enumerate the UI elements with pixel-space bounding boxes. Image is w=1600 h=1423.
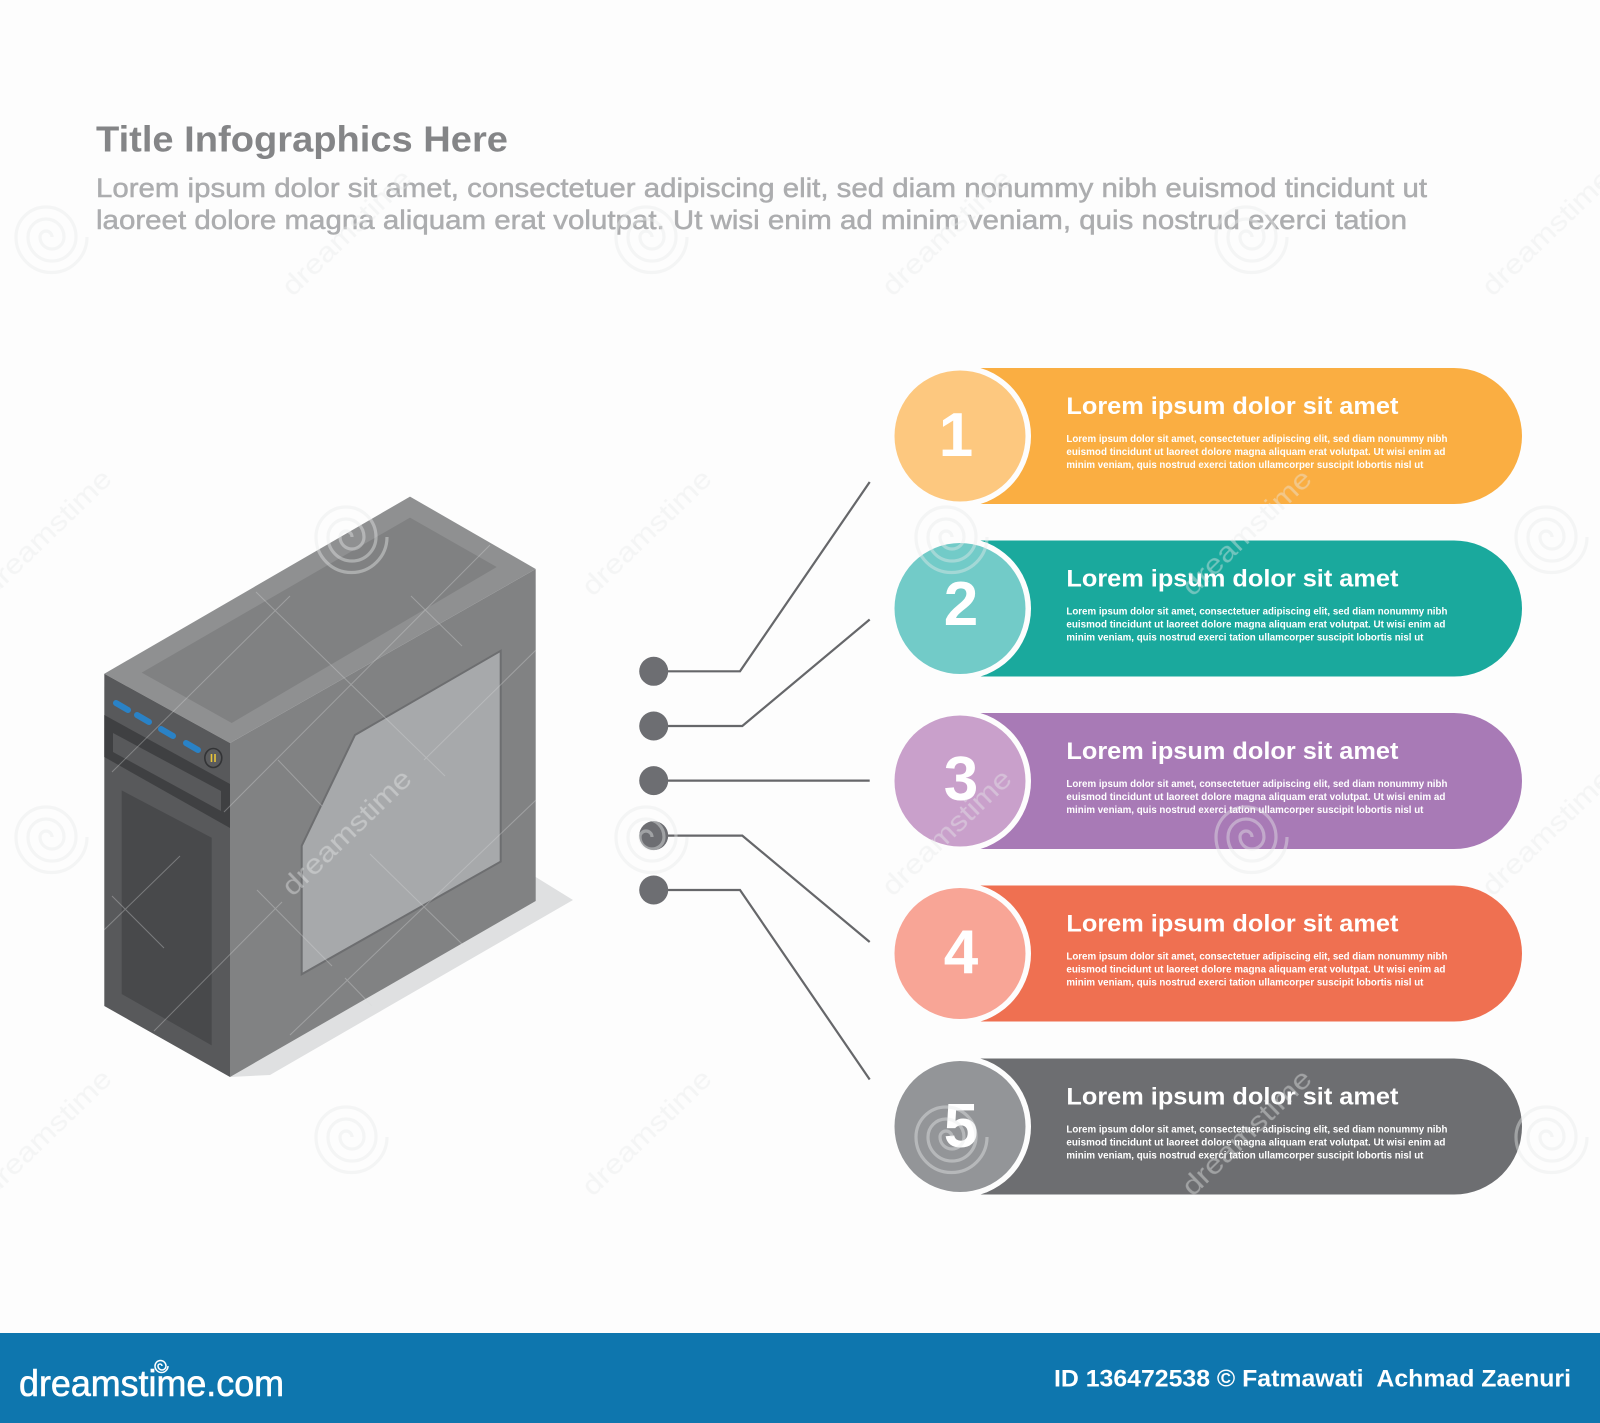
- panel: item 2 teal: minim veniam, quis nostrud exerci tation ullamcorper suscipit lobortis nisl ut: [1066, 632, 1424, 644]
- panel: item 2 teal: Lorem ipsum dolor sit amet: [1066, 566, 1398, 592]
- watermark words: dreamstime: [575, 1063, 718, 1202]
- panel: item 1 orange: 1: [939, 401, 973, 470]
- case floor shadow: [230, 877, 573, 1077]
- panel: item 5 grey: Lorem ipsum dolor sit amet, consectetuer adipiscing elit, sed diam nonummy nibh: [1066, 1124, 1447, 1136]
- panel: item 4 red-orange: euismod tincidunt ut laoreet dolore magna aliquam erat volutpat. Ut wisi enim ad: [1066, 964, 1445, 976]
- watermark hairlines on case: [104, 545, 536, 1035]
- panel: item 4 red-orange: Lorem ipsum dolor sit amet: [1066, 910, 1398, 938]
- panel: item 5 grey: minim veniam, quis nostrud exerci tation ullamcorper suscipit lobortis nisl ut: [1066, 1150, 1424, 1162]
- panel: item 1 orange: Lorem ipsum dolor sit amet: [1066, 393, 1398, 420]
- watermark words: dreamstime: [1175, 463, 1318, 602]
- case front face: [104, 674, 230, 1077]
- case side window: [302, 651, 501, 974]
- panel: item 3 purple: [889, 710, 1522, 852]
- connector lines and dots: [639, 482, 870, 1080]
- panel: item 2 teal: Lorem ipsum dolor sit amet, consectetuer adipiscing elit, sed diam nonummy nibh: [1066, 606, 1447, 618]
- panel: item 1 orange: Lorem ipsum dolor sit amet, consectetuer adipiscing elit, sed diam nonummy nibh: [1066, 433, 1447, 445]
- panel: item 5 grey: [889, 1056, 1522, 1198]
- watermark words: dreamstime: [875, 163, 1018, 302]
- panel: item 3 purple: Lorem ipsum dolor sit amet: [1066, 738, 1398, 765]
- watermark words: [0, 163, 1600, 1202]
- watermark spirals: [16, 207, 1587, 1172]
- watermark words: dreamstime: [1475, 163, 1600, 302]
- panel: item 1 orange: minim veniam, quis nostrud exerci tation ullamcorper suscipit lobortis nisl ut: [1066, 459, 1424, 471]
- case side face: [230, 569, 536, 1077]
- panel: item 4 red-orange: 4: [944, 918, 979, 987]
- subtitle text block: [96, 173, 1428, 235]
- watermark words: dreamstime: [1475, 763, 1600, 902]
- panel: item 5 grey: euismod tincidunt ut laoreet dolore magna aliquam erat volutpat. Ut wisi enim ad: [1066, 1136, 1445, 1148]
- panel: item 5 grey: 5: [944, 1092, 978, 1161]
- watermark words: dreamstime: [575, 463, 718, 602]
- watermark overlay: [0, 163, 1600, 1202]
- subtitle text block: laoreet dolore magna aliquam erat volutpat. Ut wisi enim ad minim veniam, quis nostrud exerci tation: [96, 205, 1407, 235]
- front panel USB ports: [116, 703, 198, 750]
- case top face: [104, 497, 536, 743]
- footer logo: dreamstime.com: [19, 1363, 284, 1404]
- panel: item 2 teal: euismod tincidunt ut laoreet dolore magna aliquam erat volutpat. Ut wisi enim ad: [1066, 618, 1445, 630]
- footer credit: ID 136472538 © Fatmawati Achmad Zaenuri: [1054, 1366, 1571, 1392]
- panel: item 2 teal: 2: [944, 570, 978, 639]
- watermark words: dreamstime: [1175, 1063, 1318, 1202]
- panel: item 3 purple: Lorem ipsum dolor sit amet, consectetuer adipiscing elit, sed diam nonummy nibh: [1066, 778, 1447, 790]
- title: Title Infographics Here: [96, 118, 508, 160]
- watermark words: dreamstime: [275, 763, 418, 902]
- footer bar: [0, 1333, 1600, 1423]
- panel: item 3 purple: euismod tincidunt ut laoreet dolore magna aliquam erat volutpat. Ut wisi enim ad: [1066, 791, 1445, 803]
- panel: item 1 orange: [889, 365, 1522, 507]
- watermark words: dreamstime: [875, 763, 1018, 902]
- watermark words: dreamstime: [275, 163, 418, 302]
- isometric computer case: [104, 497, 573, 1077]
- panel: item 1 orange: euismod tincidunt ut laoreet dolore magna aliquam erat volutpat. Ut wisi enim ad: [1066, 446, 1445, 458]
- panel: item 2 teal: [889, 538, 1522, 680]
- subtitle text block: Lorem ipsum dolor sit amet, consectetuer adipiscing elit, sed diam nonummy nibh euismod tincidunt ut: [96, 173, 1428, 203]
- panel: item 3 purple: minim veniam, quis nostrud exerci tation ullamcorper suscipit lobortis nisl ut: [1066, 804, 1424, 816]
- panel: item 5 grey: Lorem ipsum dolor sit amet: [1066, 1084, 1398, 1110]
- panel: item 4 red-orange: minim veniam, quis nostrud exerci tation ullamcorper suscipit lobortis nisl ut: [1066, 976, 1424, 988]
- panel: item 4 red-orange: [889, 882, 1522, 1024]
- panel: item 3 purple: 3: [944, 745, 978, 814]
- panel: item 4 red-orange: Lorem ipsum dolor sit amet, consectetuer adipiscing elit, sed diam nonummy nibh: [1066, 950, 1447, 962]
- power button: [205, 748, 222, 768]
